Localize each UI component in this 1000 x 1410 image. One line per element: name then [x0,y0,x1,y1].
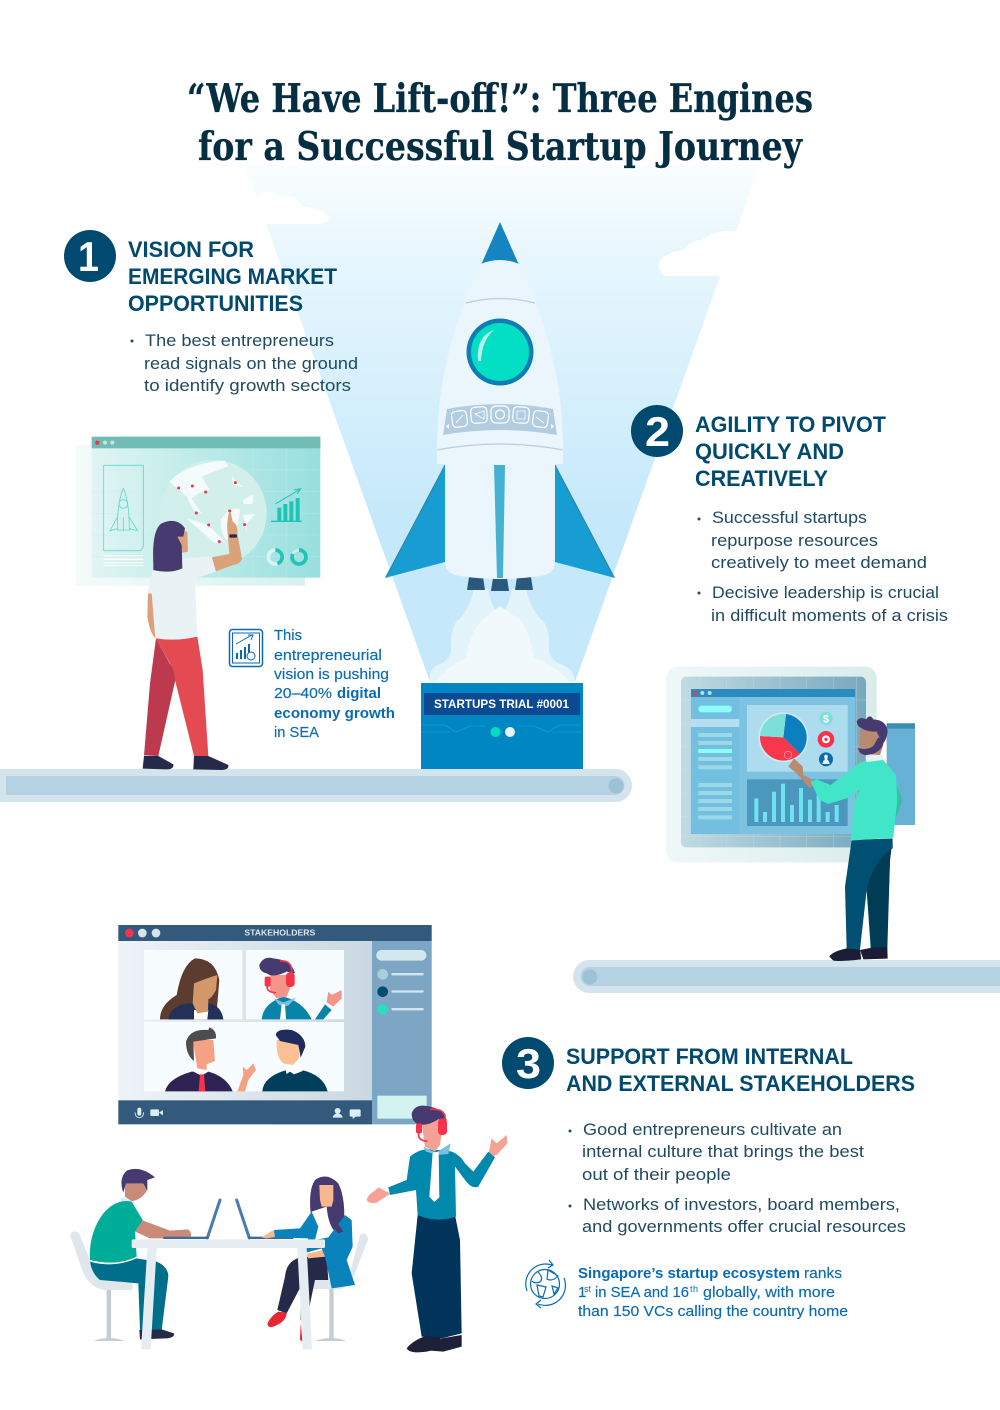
section 1 body text: to identify growth sectors [144,376,351,395]
rocket fins [385,465,615,578]
callout: digital economy growth: economy growth [274,705,395,722]
callout: Singapore ecosystem ranking: Singapore’s startup ecosystem [578,1265,800,1282]
section 3 body text [568,1120,906,1236]
laptops [163,1200,293,1239]
section 2 number badge [631,405,683,457]
callout: digital economy growth: 20–40% [274,685,332,702]
callout: Singapore ecosystem ranking: globally, with more [703,1284,835,1301]
callout: Singapore ecosystem ranking: 1 [578,1284,586,1301]
section 3 body text: Networks of investors, board members, [583,1195,900,1214]
icon: rotating globe [526,1260,565,1308]
section 2 illustration: dashboard and man [666,667,915,961]
callout: digital economy growth: vision is pushing [274,666,389,683]
section 3 number badge: 3 [516,1040,541,1087]
launch platform: STARTUPS TRIAL #0001 [434,699,570,711]
callout: Singapore ecosystem ranking: than 150 VCs calling the country home [578,1303,848,1320]
section 3 illustration: video call window: STAKEHOLDERS [244,928,316,938]
section 3 body text: out of their people [582,1165,731,1184]
bar chart [754,784,839,822]
right shelf [573,960,1000,993]
callout: Singapore ecosystem ranking: th [690,1284,698,1294]
section 2 heading [695,412,887,491]
rocket smoke [430,589,575,682]
section 3 body text: Good entrepreneurs cultivate an [583,1120,842,1139]
pie chart [758,712,808,762]
seated woman [262,1177,355,1342]
section 1 body text: The best entrepreneurs [145,331,334,350]
table [132,1239,325,1349]
call control icons [135,1108,361,1119]
rocket [385,222,615,682]
callout: Singapore ecosystem ranking: ranks [804,1265,842,1282]
participant: man with red tie [165,1027,256,1091]
title [187,76,813,170]
callout: digital economy growth: entrepreneurial [274,647,382,664]
title: for a Successful Startup Journey [198,124,803,170]
rocket window [466,318,534,386]
sidebar items [376,950,427,1119]
chairs [70,1231,368,1341]
participant: man in dark sweater [262,1030,328,1091]
section 3 illustration: team at table [70,1106,507,1352]
light beam background [245,165,760,682]
section 3 illustration: video call window [118,925,432,1124]
rocket centre stripe [494,465,505,578]
rocket lines [437,298,563,450]
section 1 heading: EMERGING MARKET [128,264,338,289]
cloud right [659,231,760,276]
rocket frame [104,465,143,551]
participant: woman long hair [160,958,223,1019]
icon: growth chart with dollar [230,630,262,666]
video tiles [144,950,344,1091]
section 2 body text: creatively to meet demand [711,553,927,572]
section 2 heading: AGILITY TO PIVOT [695,412,887,437]
dashboard screen [666,667,915,862]
section 3 heading: SUPPORT FROM INTERNAL [566,1044,853,1069]
section 2 body text: Decisive leadership is crucial [712,583,939,602]
callout: Singapore ecosystem ranking: in SEA and 16 [595,1284,689,1301]
section 2 heading: QUICKLY AND [695,439,844,464]
seated man [90,1169,191,1339]
cloud left [250,191,329,224]
section 1 number badge [64,230,116,282]
mini chart [271,498,302,522]
standing man with headset [367,1106,507,1352]
section 2 number badge: 2 [645,408,670,455]
rocket control panel [443,404,557,435]
left shelf [0,769,632,802]
callout: digital economy growth: digital [337,685,381,702]
section 2 body text: repurpose resources [711,531,878,550]
section 1 heading: VISION FOR [128,237,254,262]
section 3 body text: and governments offer crucial resources [582,1217,906,1236]
callout: Singapore ecosystem ranking: st [584,1284,591,1294]
man [788,716,903,961]
section 2 body text: in difficult moments of a crisis [711,606,948,625]
launch platform [421,683,583,769]
globe [160,460,267,567]
woman [143,512,242,770]
dashboard screen: $ [823,713,829,725]
section 3 heading: AND EXTERNAL STAKEHOLDERS [566,1071,915,1096]
section 1 number badge: 1 [78,233,99,280]
rocket nozzles [467,577,533,591]
section 1 body text [130,331,358,395]
section 3 body text: internal culture that brings the best [582,1142,864,1161]
callout: digital economy growth: This [274,627,302,644]
section 2 heading: CREATIVELY [695,466,828,491]
growth screen [76,437,320,586]
section 1 heading: OPPORTUNITIES [128,291,303,316]
section 1 heading [128,237,338,316]
callout: digital economy growth [274,627,395,741]
section 1 body text: read signals on the ground [144,354,358,373]
section 2 body text [698,508,948,625]
callout: digital economy growth: in SEA [274,724,319,741]
donuts [268,550,306,564]
section 2 body text: Successful startups [712,508,867,527]
title: “We Have Lift-off!”: Three Engines [187,76,813,122]
rocket body [437,260,563,579]
participant: man with headset [259,958,342,1019]
section 3 heading [566,1044,915,1096]
rocket nose cone [481,222,519,265]
section 1 illustration: screen and woman [76,437,320,770]
section 3 number badge [502,1037,554,1089]
callout: Singapore ecosystem ranking [578,1265,848,1320]
